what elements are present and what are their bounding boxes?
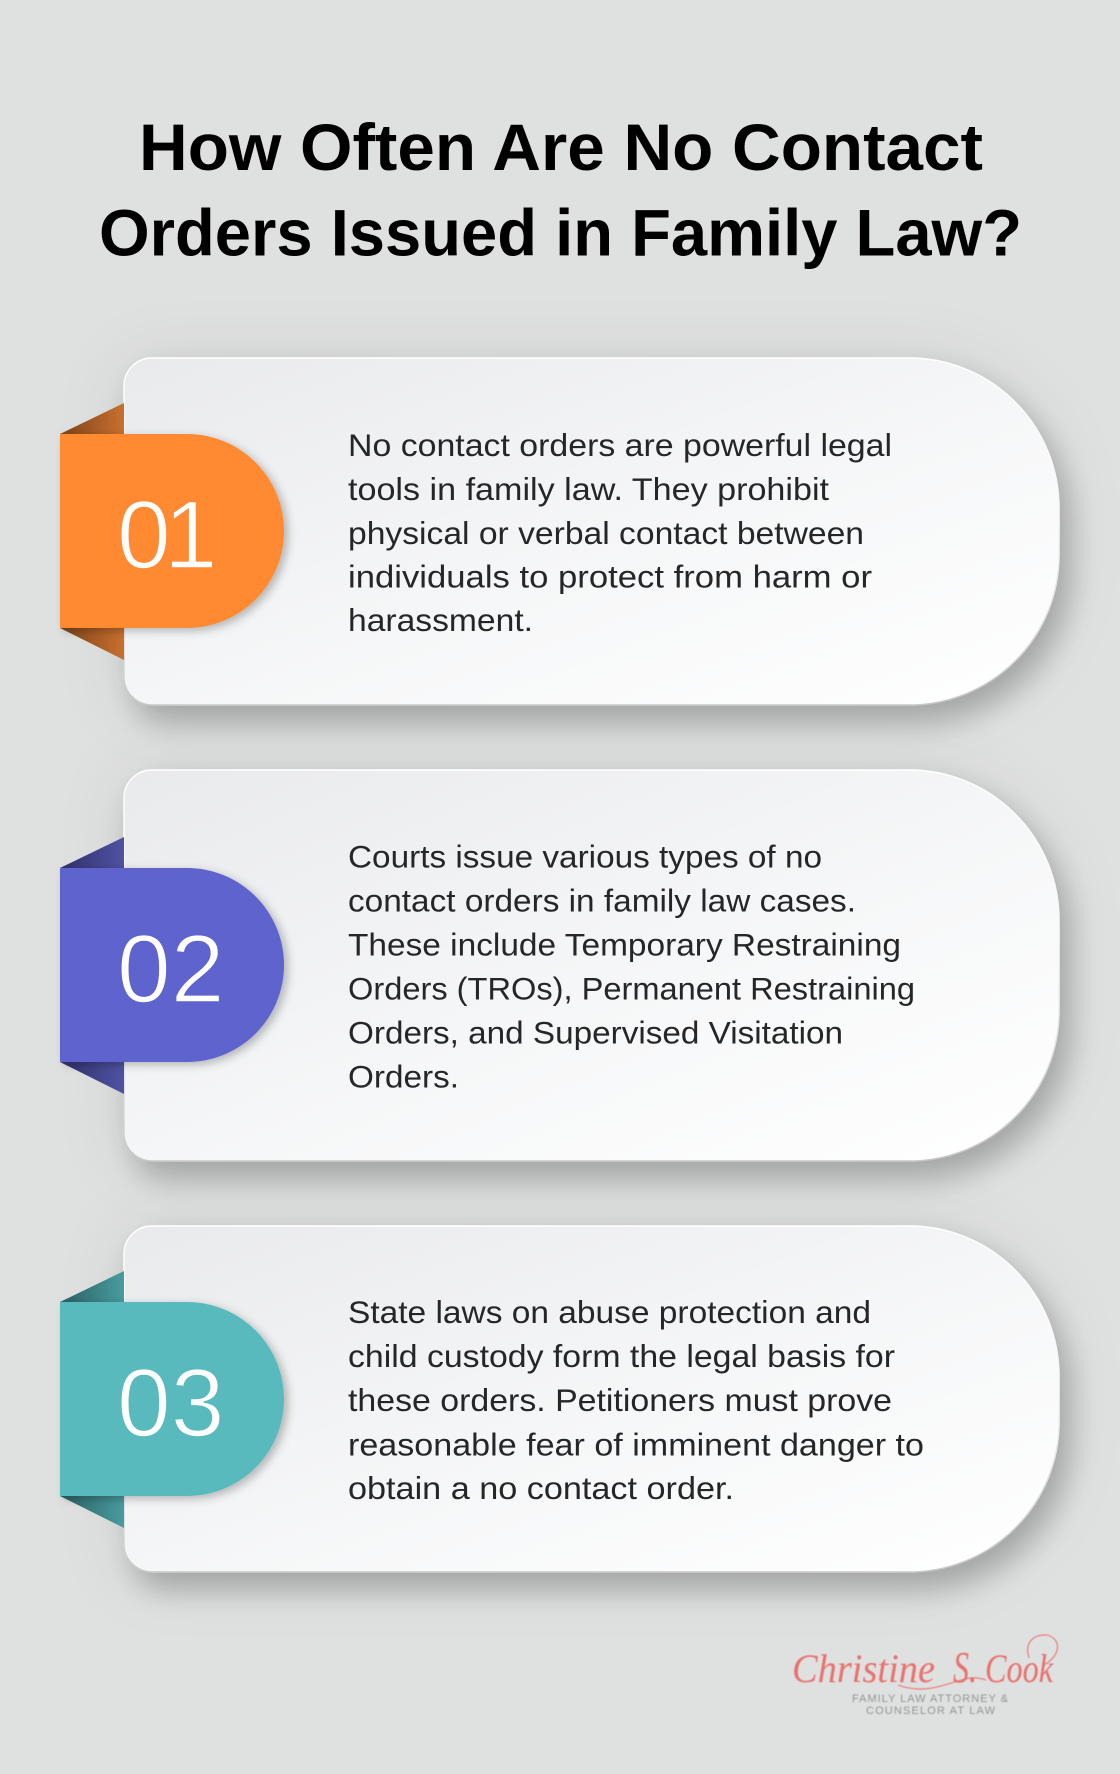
logo: Christine S. Cook: Cook bbox=[985, 1646, 1054, 1691]
panel: step 03 bbox=[60, 1226, 1059, 1572]
text: step 01: physical or verbal contact between bbox=[348, 515, 864, 551]
ribbon fold: step 02 bbox=[60, 837, 124, 1094]
text: step 03: these orders. Petitioners must prove bbox=[348, 1382, 892, 1418]
logo: Christine S. Cook: Christine bbox=[792, 1646, 935, 1691]
title: How Often Are No Contact bbox=[139, 110, 983, 184]
text: step 03: reasonable fear of imminent danger to bbox=[348, 1426, 924, 1462]
text: step 02: Orders, and Supervised Visitation bbox=[348, 1014, 843, 1050]
text: step 02: Orders. bbox=[348, 1058, 459, 1094]
title: Orders Issued in Family Law? bbox=[99, 196, 1022, 270]
text: step 01: No contact orders are powerful legal bbox=[348, 427, 892, 463]
ribbon fold: step 03 bbox=[60, 1271, 124, 1528]
number badge: step 02 bbox=[60, 868, 284, 1062]
text: step 03 bbox=[348, 1294, 924, 1506]
text: step 02: Orders (TROs), Permanent Restraining bbox=[348, 970, 915, 1006]
panel: step 02 bbox=[60, 770, 1059, 1161]
title bbox=[99, 110, 1022, 270]
text: step 01: individuals to protect from harm or bbox=[348, 558, 872, 594]
text: step 02: Courts issue various types of no bbox=[348, 838, 822, 874]
card: step 01 bbox=[124, 358, 1059, 705]
logo: Christine S. Cook bbox=[792, 1635, 1058, 1717]
text: step 02: These include Temporary Restraining bbox=[348, 926, 901, 962]
number badge: step 01 bbox=[60, 434, 284, 628]
panel: step 01 bbox=[60, 358, 1059, 705]
text: step 03: obtain a no contact order. bbox=[348, 1470, 734, 1506]
card: step 02 bbox=[124, 770, 1059, 1161]
number badge: step 01: 01 bbox=[117, 482, 217, 589]
text: step 01 bbox=[348, 427, 892, 638]
logo: Christine S. Cook: FAMILY LAW ATTORNEY & bbox=[852, 1693, 1009, 1705]
logo: Christine S. Cook: S. bbox=[953, 1643, 977, 1692]
number badge: step 03: 03 bbox=[117, 1350, 224, 1457]
card: step 03 bbox=[124, 1226, 1059, 1572]
text: step 02: contact orders in family law cases. bbox=[348, 882, 856, 918]
text: step 02 bbox=[348, 838, 915, 1094]
number badge: step 02: 02 bbox=[117, 916, 224, 1023]
text: step 03: child custody form the legal basis for bbox=[348, 1338, 895, 1374]
ribbon fold: step 01 bbox=[60, 403, 124, 660]
text: step 01: tools in family law. They prohibit bbox=[348, 471, 829, 507]
text: step 03: State laws on abuse protection and bbox=[348, 1294, 871, 1330]
number badge: step 03 bbox=[60, 1302, 284, 1496]
logo: Christine S. Cook: COUNSELOR AT LAW bbox=[866, 1705, 996, 1717]
text: step 01: harassment. bbox=[348, 602, 533, 638]
